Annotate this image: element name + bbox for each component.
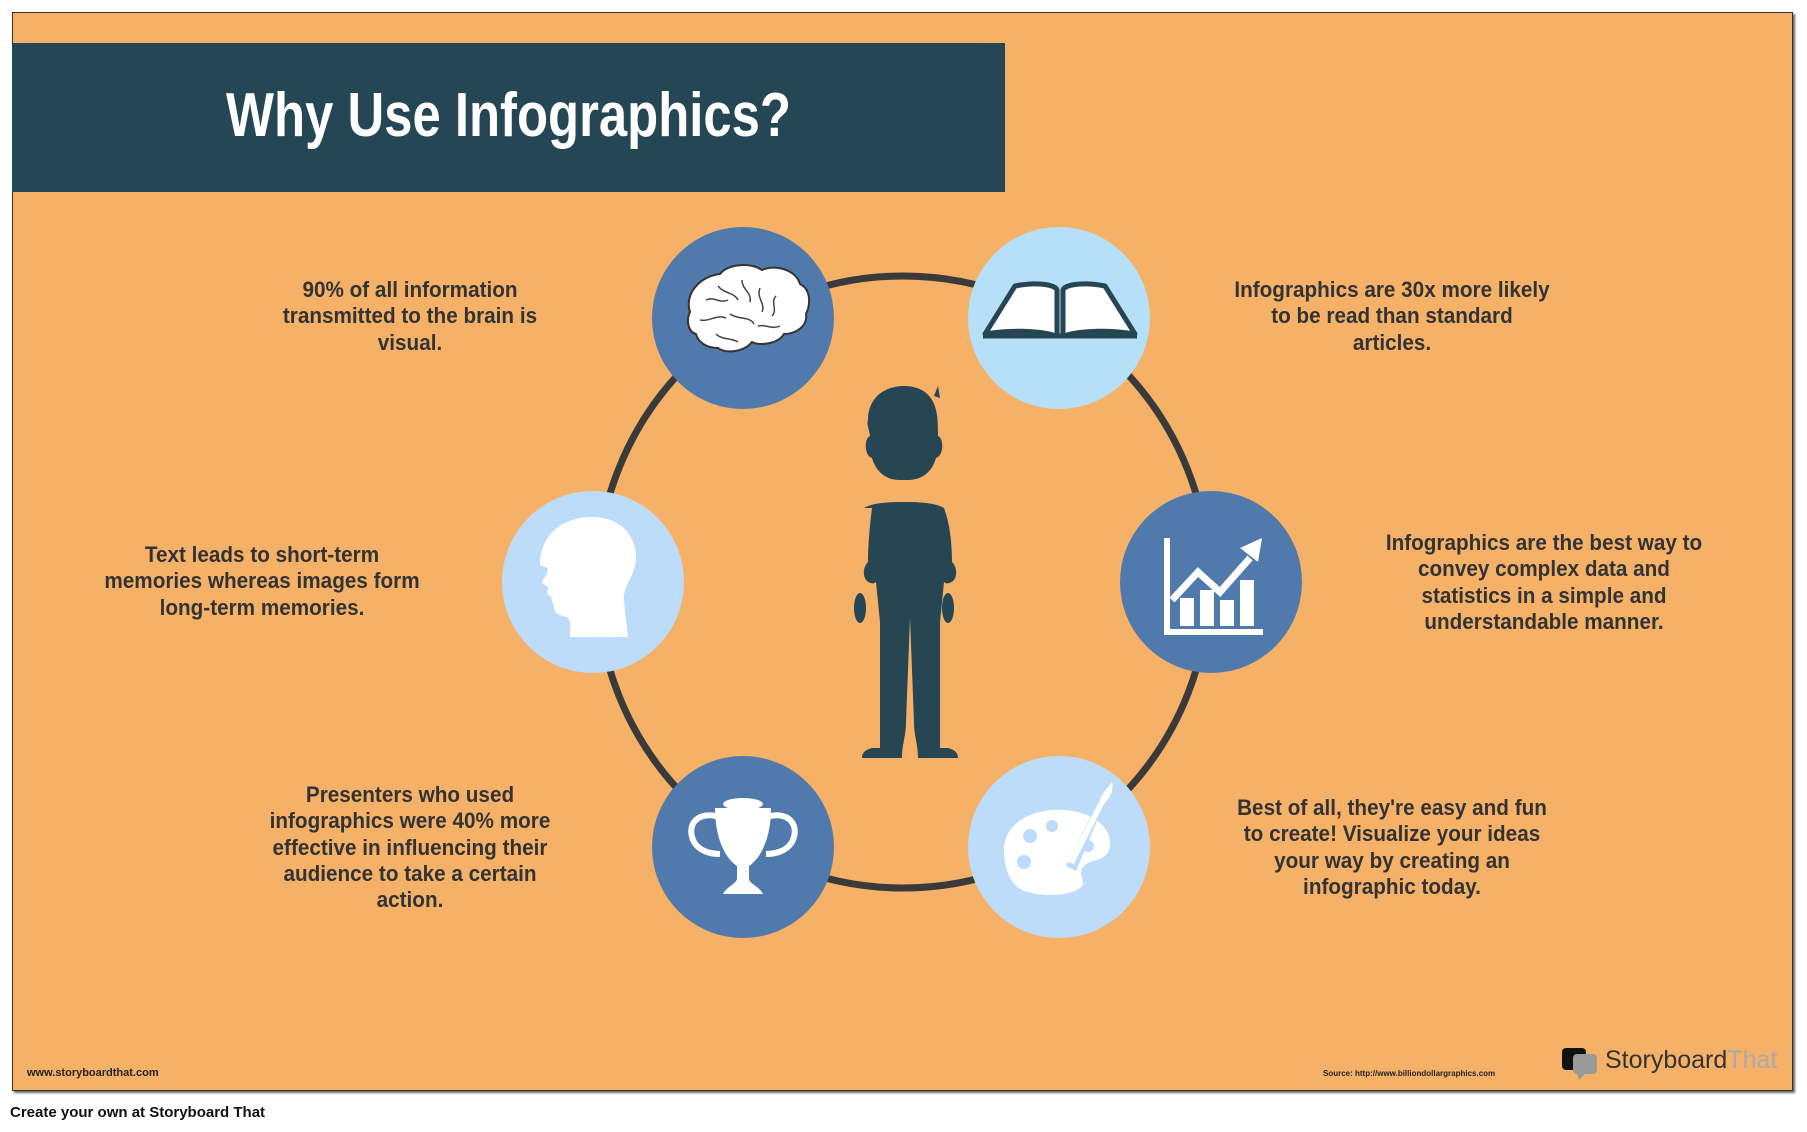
text: presenters fact: audience to take a certain xyxy=(283,861,537,886)
text: brain fact: 90% of all information xyxy=(302,277,518,302)
text: fun fact xyxy=(1237,795,1547,899)
ring xyxy=(597,276,1209,888)
text: data fact: understandable manner. xyxy=(1424,609,1664,634)
icon: brain xyxy=(652,227,834,409)
text: brain fact: transmitted to the brain is xyxy=(283,303,537,328)
text: memory fact xyxy=(104,542,420,620)
bottom caption: Create your own at Storyboard That xyxy=(10,1104,265,1121)
title bar xyxy=(12,43,1005,192)
person silhouette xyxy=(854,386,958,758)
text: brain fact: visual. xyxy=(378,330,442,355)
text: fun fact: your way by creating an xyxy=(1274,848,1510,873)
footer source: Source: http://www.billiondollargraphics.com xyxy=(1323,1069,1495,1078)
text: presenters fact: Presenters who used xyxy=(306,782,514,807)
text: presenters fact: effective in influencing their xyxy=(273,835,547,860)
logo xyxy=(1562,1046,1778,1080)
text: memory fact: long-term memories. xyxy=(160,595,364,620)
text: book fact: Infographics are 30x more likely xyxy=(1234,277,1550,302)
text: presenters fact xyxy=(270,782,550,912)
text: data fact: Infographics are the best way to xyxy=(1386,530,1702,555)
text: presenters fact: infographics were 40% more xyxy=(270,808,550,833)
text: book fact: to be read than standard xyxy=(1271,303,1513,328)
text: memory fact: memories whereas images form xyxy=(104,568,420,593)
icon: book xyxy=(968,227,1150,409)
text: presenters fact: action. xyxy=(377,887,443,912)
icon: head profile xyxy=(502,491,684,673)
title: Why Use Infographics? xyxy=(226,81,791,150)
icon: palette xyxy=(968,756,1150,938)
text: fun fact: infographic today. xyxy=(1303,874,1481,899)
icon: trophy xyxy=(652,756,834,938)
text: book fact xyxy=(1234,277,1550,355)
text: memory fact: Text leads to short-term xyxy=(145,542,379,567)
text: data fact: convey complex data and xyxy=(1418,556,1670,581)
text: brain fact xyxy=(283,277,537,355)
logo: StoryboardThat xyxy=(1605,1046,1777,1074)
footer url: www.storyboardthat.com xyxy=(27,1067,159,1079)
text: data fact: statistics in a simple and xyxy=(1421,583,1667,608)
text: data fact xyxy=(1386,530,1702,634)
text: fun fact: Best of all, they're easy and fun xyxy=(1237,795,1547,820)
text: fun fact: to create! Visualize your ideas xyxy=(1244,821,1540,846)
text: book fact: articles. xyxy=(1353,330,1431,355)
icon: chart xyxy=(1120,491,1302,673)
